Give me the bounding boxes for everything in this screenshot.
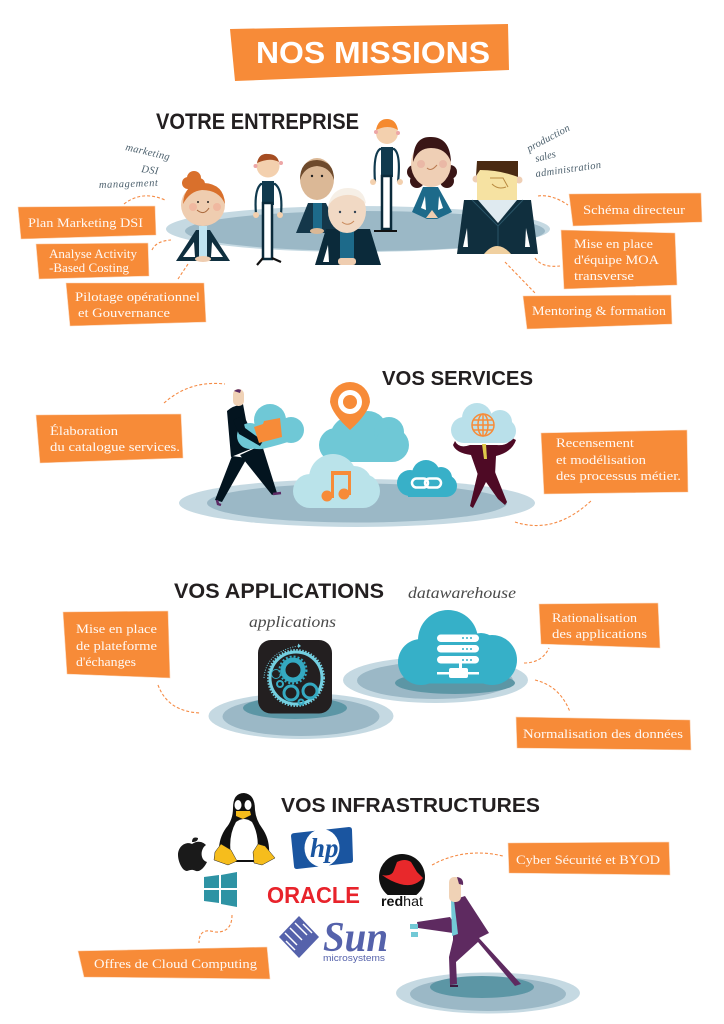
callout: plateforme d'échanges [63,611,170,678]
callout: rationalisation: Rationalisation [552,610,638,625]
callout: cloud computing: Offres de Cloud Computing [94,956,258,971]
callout: recensement: des processus métier. [556,468,681,483]
callout: catalogue services: Élaboration [50,423,119,438]
panel: services illustration [179,382,535,527]
words: right functions [524,123,602,180]
character: man carrying folder cloud [215,389,304,505]
platform ellipse [208,693,394,739]
character: big boss [457,161,538,254]
platform ellipse [396,972,580,1014]
callout: catalogue services [36,414,183,463]
callout: recensement: et modélisation [556,452,647,467]
callout: cyber securite: Cyber Sécurité et BYOD [516,852,660,867]
logo: red hat: redhat [381,893,423,909]
callout: rationalisation [539,603,660,648]
callout: plateforme d'échanges: d'échanges [76,654,136,669]
callout: equipe MOA [561,230,677,289]
character: old man [315,188,381,265]
heading: vos applications: VOS APPLICATIONS [174,580,384,603]
callout: equipe MOA: d'équipe MOA [574,252,660,267]
icon: windows [204,872,237,907]
icon: server cloud [398,610,517,685]
icon: hp: hp [310,833,339,863]
callout: plateforme d'échanges: Mise en place [76,621,157,636]
callout: rationalisation: des applications [552,626,647,641]
callout: analyse: -Based Costing [49,260,129,275]
heading: vos services: VOS SERVICES [382,368,533,390]
callout: schema directeur [569,193,702,226]
callout: catalogue services: du catalogue services. [50,439,180,454]
panel: datawarehouse cloud [343,610,528,703]
character: woman with bun [176,171,230,262]
callout: pilotage [66,283,206,326]
platform ellipse [179,479,535,527]
panel: applications gear icon [208,640,394,739]
callout: schema directeur: Schéma directeur [583,202,686,217]
label: applications: applications [249,614,336,631]
panel: infrastructure character [396,877,580,1014]
character: standing man [253,154,283,265]
connectors: services [164,383,592,526]
words: right functions: production [524,123,572,155]
callout: equipe MOA: transverse [574,268,634,283]
callout: pilotage: Pilotage opérationnel [75,289,200,304]
callout: plan marketing [18,206,156,239]
cloud: link [397,460,457,497]
words: left functions: DSI [140,164,159,177]
cloud: location pin [319,382,409,462]
words: right functions: administration [535,160,602,180]
words: left functions: marketing [124,142,171,163]
title: NOS MISSIONS [256,35,490,70]
logo: sun microsystems: microsystems [323,953,385,964]
connectors: entreprise [124,196,568,293]
character: purple man pushing [410,877,521,986]
callout: cyber securite [508,842,670,875]
words: left functions [99,142,171,191]
logo: oracle: ORACLE [267,882,360,908]
callout: normalisation: Normalisation des données [523,726,683,741]
callout: recensement [541,430,688,494]
callout: normalisation [516,717,691,750]
callout: cloud computing [78,947,270,979]
callout: analyse: Analyse Activity [49,246,137,261]
logo: sun microsystems: Sun [323,915,388,961]
character: woman with dark hair [407,137,457,219]
character: globe-head man [451,403,516,508]
callout: analyse [36,243,149,279]
platform ellipse [343,657,528,703]
label: datawarehouse: datawarehouse [408,585,516,602]
connectors: applications [158,648,570,713]
callout: mentoring: Mentoring & formation [532,303,667,318]
words: right functions: sales [534,149,557,165]
callout: mentoring [523,295,672,329]
callout: plateforme d'échanges: de plateforme [76,638,157,653]
callout: plan marketing: Plan Marketing DSI [28,215,143,230]
callout: pilotage: et Gouvernance [78,305,170,320]
heading: vos infrastructures: VOS INFRASTRUCTURES [281,795,540,817]
logo: red hat [378,854,426,911]
icon: hp [291,827,353,869]
title [230,24,509,81]
words: left functions: management [99,178,159,191]
logo: sun microsystems [279,915,388,964]
icon: apple [178,838,207,871]
icon: penguin [214,793,275,865]
callout: recensement: Recensement [556,435,634,450]
connectors: infrastructure [199,853,503,943]
callout: equipe MOA: Mise en place [574,236,653,251]
character: standing man, orange hair [370,119,403,231]
heading: votre entreprise: VOTRE ENTREPRISE [156,109,359,134]
cloud: music [293,454,380,508]
icon: gears [258,640,332,714]
platform ellipse [166,206,550,252]
character: man with brown hair [296,158,340,234]
panel: entreprise team [166,119,550,265]
